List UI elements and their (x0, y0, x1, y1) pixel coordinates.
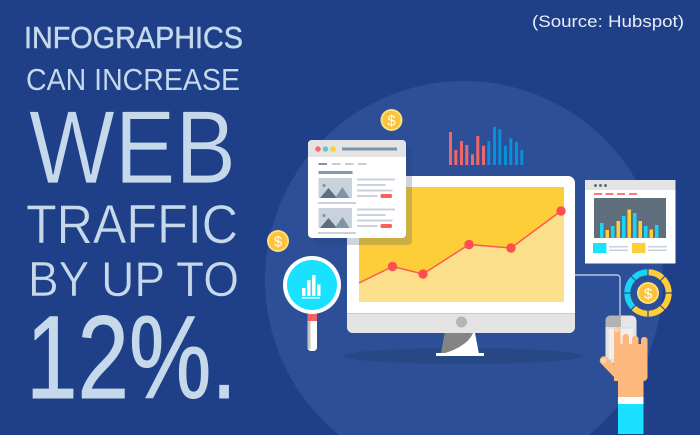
hand and sleeve (601, 327, 648, 434)
cuff (618, 397, 644, 404)
donut center coin (637, 282, 659, 304)
icon: coin top (380, 109, 402, 131)
floating bar chart (449, 127, 523, 165)
browser header (308, 140, 406, 157)
headline text: 12%. (26, 292, 237, 424)
mouse device (606, 316, 636, 364)
right browser header (585, 180, 676, 190)
headline text: TRAFFIC (26, 193, 238, 255)
headline text: CAN INCREASE (26, 63, 240, 97)
lens bar icon (302, 275, 320, 298)
line area chart (359, 187, 566, 302)
magnifier lens (283, 256, 341, 314)
browser nav (318, 163, 366, 165)
monitor shadow ellipse (343, 348, 583, 364)
article row 2 (318, 208, 395, 234)
monitor chin (347, 313, 575, 333)
donut coin icon: $ (644, 286, 653, 302)
article row 1 (318, 178, 395, 204)
hand (604, 327, 648, 397)
browser window shadow (314, 146, 412, 245)
headline text: WEB (29, 90, 236, 206)
magnifier icon (283, 256, 341, 351)
browser window: left (308, 140, 406, 238)
right browser legend (593, 243, 667, 253)
browser window: right (585, 180, 676, 264)
icon: coin top: $ (387, 112, 396, 130)
icon: coin left (267, 230, 289, 252)
donut coin icon (624, 269, 672, 317)
magnifier handle (308, 310, 317, 351)
monitor body (347, 176, 575, 333)
headline text: INFOGRAPHICS (24, 21, 243, 55)
headline text: BY UP TO (28, 253, 239, 307)
source note: (Source: Hubspot) (532, 13, 684, 31)
icon: coin left: $ (274, 234, 283, 250)
headline text (24, 21, 243, 424)
cable from monitor to mouse (575, 275, 620, 316)
monitor button (456, 316, 467, 328)
monitor (343, 176, 583, 364)
sleeve (618, 404, 644, 434)
monitor stand (436, 333, 484, 356)
right browser chart (594, 198, 666, 238)
